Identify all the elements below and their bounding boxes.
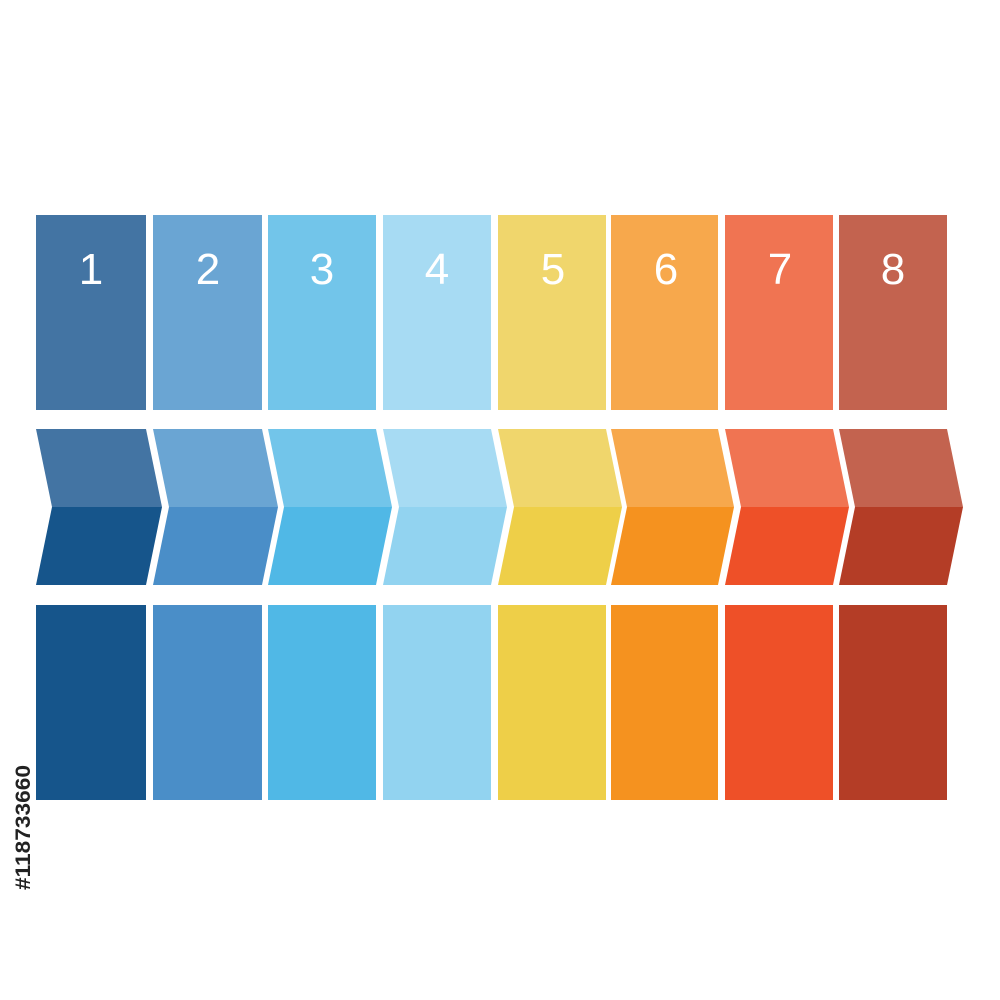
chevron 1 bbox=[36, 429, 162, 585]
column 4 bbox=[383, 215, 507, 800]
column 3 bbox=[268, 215, 392, 800]
stock id text: #118733660 bbox=[12, 765, 35, 890]
bottom box 5 bbox=[498, 605, 606, 800]
top box 1 bbox=[36, 215, 146, 410]
bottom box 3 bbox=[268, 605, 376, 800]
top box 6 bbox=[611, 215, 718, 410]
top box 3 bbox=[268, 215, 376, 410]
number 3: 3 bbox=[310, 245, 334, 294]
bottom box 1 bbox=[36, 605, 146, 800]
number 1: 1 bbox=[79, 245, 103, 294]
column 2 bbox=[153, 215, 278, 800]
top box 7 bbox=[725, 215, 833, 410]
top box 4 bbox=[383, 215, 491, 410]
chevron 5 bbox=[498, 429, 622, 585]
chevron 8 bbox=[839, 429, 963, 585]
bottom box 2 bbox=[153, 605, 262, 800]
bottom box 8 bbox=[839, 605, 947, 800]
number 5: 5 bbox=[541, 245, 565, 294]
top box 2 bbox=[153, 215, 262, 410]
chevron 4 bbox=[383, 429, 507, 585]
column 6 bbox=[611, 215, 734, 800]
bottom box 6 bbox=[611, 605, 718, 800]
column 7 bbox=[725, 215, 849, 800]
number 7: 7 bbox=[768, 245, 792, 294]
chevron 3 bbox=[268, 429, 392, 585]
number 6: 6 bbox=[654, 245, 678, 294]
bottom box 4 bbox=[383, 605, 491, 800]
column 8 bbox=[839, 215, 963, 800]
top box 8 bbox=[839, 215, 947, 410]
chevron 7 bbox=[725, 429, 849, 585]
chevron 6 bbox=[611, 429, 734, 585]
number 8: 8 bbox=[881, 245, 905, 294]
bottom box 7 bbox=[725, 605, 833, 800]
chevron 2 bbox=[153, 429, 278, 585]
top box 5 bbox=[498, 215, 606, 410]
column 1 bbox=[36, 215, 162, 800]
number 4: 4 bbox=[425, 245, 449, 294]
column 5 bbox=[498, 215, 622, 800]
number 2: 2 bbox=[196, 245, 220, 294]
